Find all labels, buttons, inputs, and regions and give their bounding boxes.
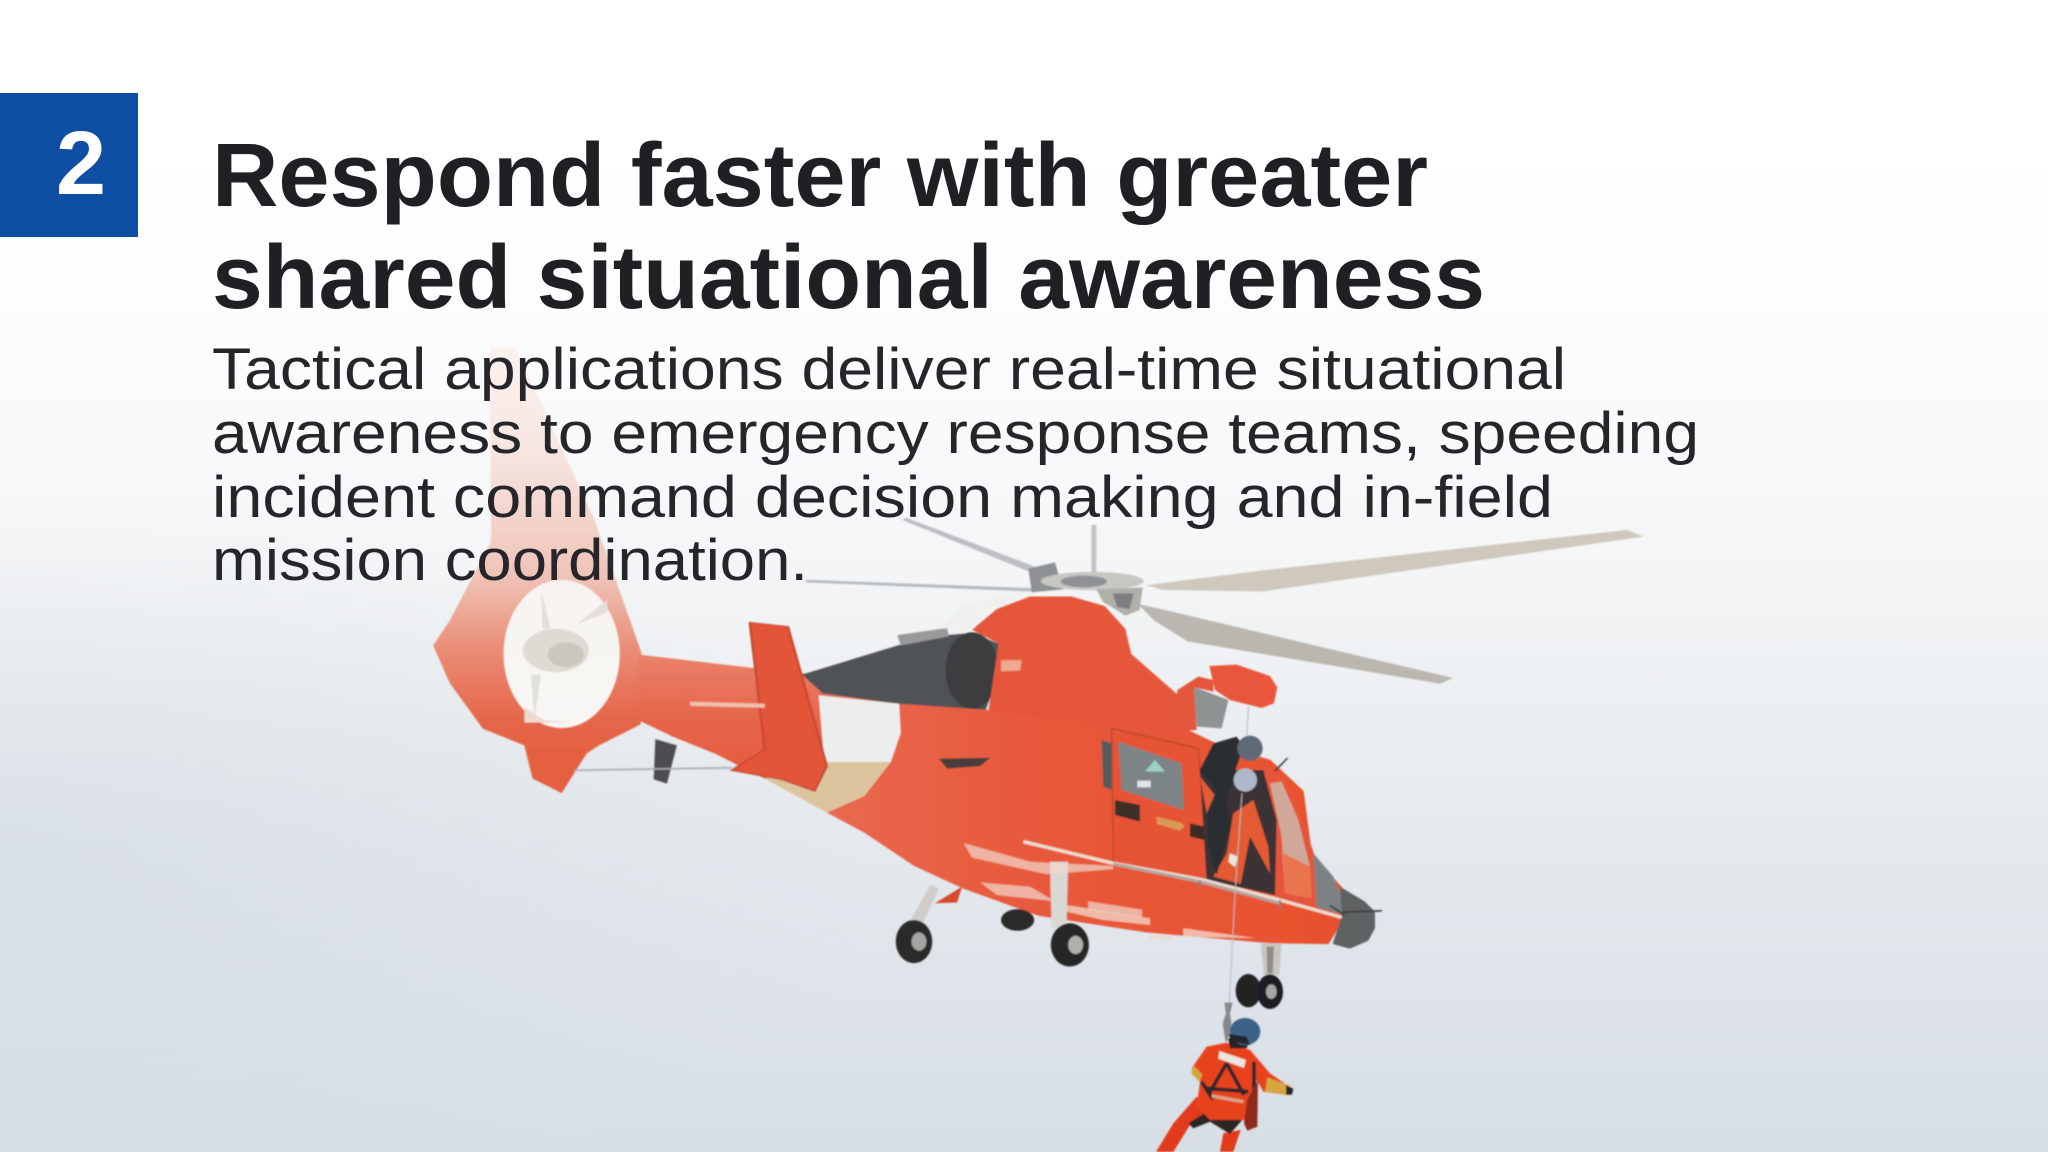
fuselage, tail and rotor [433, 347, 1643, 967]
rear slot window [1102, 740, 1112, 790]
dark-suited crew member [1199, 736, 1263, 875]
rescue swimmer on hoist [1156, 1003, 1293, 1152]
tail boom [639, 655, 899, 779]
tail skid [654, 739, 677, 784]
torso [1192, 1043, 1292, 1120]
body text [212, 337, 1699, 593]
body text: Tactical applications deliver real-time situational [212, 337, 1566, 402]
harness [1202, 1062, 1254, 1100]
hoist arm and pod [1174, 665, 1277, 732]
left haze band [0, 500, 1000, 1152]
neck and helmet [1228, 1038, 1250, 1048]
engine intake [945, 632, 999, 709]
orange crew member [1200, 777, 1270, 884]
panel markings [939, 758, 990, 769]
belly markings [1067, 905, 1257, 939]
tail wire [574, 767, 732, 771]
cabin, nose and nose gear [1023, 665, 1382, 1152]
sleeves [1191, 1065, 1291, 1095]
vertical stabilizer [732, 623, 827, 791]
rotor hub [1028, 562, 1144, 616]
cabin opening [1200, 770, 1277, 895]
number badge [0, 93, 138, 237]
side door [1112, 728, 1208, 880]
main rotor blades [806, 517, 1644, 684]
body text: mission coordination. [212, 528, 808, 593]
heading: Respond faster with greater [212, 126, 1428, 226]
radome nose [1333, 887, 1375, 949]
main rotor cowl [972, 596, 1183, 739]
gear bag [1244, 1080, 1258, 1131]
door window [1118, 742, 1184, 810]
helicopter photo illustration [433, 347, 1643, 1152]
front door frame [1253, 763, 1317, 912]
hoist cable [1229, 707, 1249, 1003]
belly white patches [964, 843, 1142, 918]
body text: incident command decision making and in-field [212, 465, 1553, 530]
number badge: 2 [56, 114, 106, 214]
white fuselage band [819, 695, 901, 763]
tan fuselage band [765, 762, 891, 813]
reflective patch [1218, 1051, 1246, 1068]
fuselage [827, 704, 1345, 944]
engine housing [802, 633, 999, 711]
door labels [1115, 800, 1205, 840]
heading: shared situational awareness [212, 228, 1485, 328]
white stripe and rail [1023, 842, 1342, 917]
body text: awareness to emergency response teams, speeding [212, 401, 1699, 466]
heading [212, 126, 1485, 328]
nose antenna [1274, 757, 1382, 916]
upper cowl white panel [939, 592, 1026, 630]
hoist hook [1223, 1003, 1233, 1042]
nose landing gear [1236, 943, 1283, 1009]
front window [1270, 782, 1312, 898]
windshield [1313, 853, 1343, 914]
rear landing gear [896, 862, 1089, 967]
tail fin and fenestron ring [433, 347, 649, 793]
legs [1156, 1097, 1241, 1152]
